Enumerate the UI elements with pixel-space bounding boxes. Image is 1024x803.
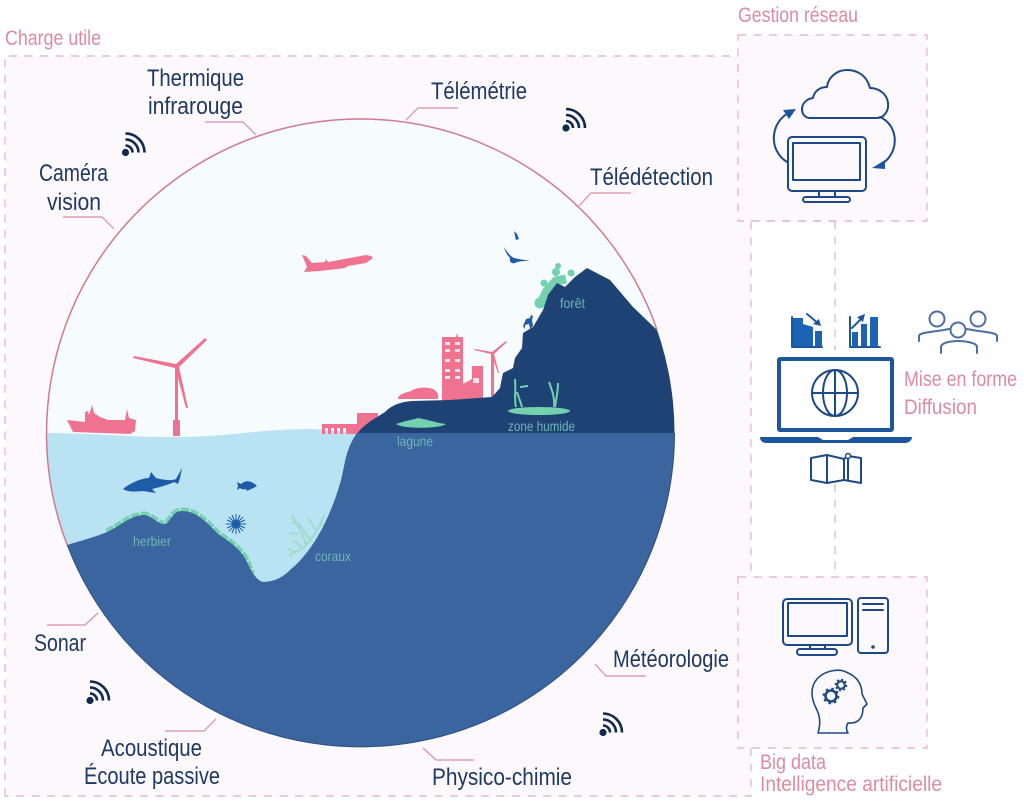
heading: mise en forme diffusion [904,368,1017,419]
icon: wifi top right [562,109,585,132]
pier [322,413,378,434]
icon: people [919,312,997,353]
sensor: caméra vision: Caméra [39,160,109,187]
sensor: physico-chimie [423,748,572,791]
icon: cloud and computer [774,70,895,202]
corals [288,515,326,556]
circular scene [40,110,700,760]
shark [123,468,182,493]
fish [237,481,257,491]
icon: desktop computer [783,598,888,655]
lagoon [396,418,446,428]
sensor: acoustique écoute passive: Écoute passive [84,763,220,790]
label: zone humide: zone humide [508,418,575,434]
wind turbine [133,338,207,436]
sensor: météorologie: Météorologie [613,646,729,673]
panel: charge utile [5,56,751,796]
heading: big data intelligence artificielle: Intelligence artificielle [760,773,942,796]
icon: wifi top left [122,134,144,156]
seabed outline [67,433,674,747]
icon: laptop with globe [760,359,912,443]
wetland [508,379,570,415]
sensor: acoustique écoute passive [84,719,220,790]
label: forêt: forêt [560,295,585,311]
sensor: télémétrie [406,78,527,120]
sensor: télédétection [579,164,713,206]
coastal land [357,268,700,434]
heading: mise en forme diffusion: Diffusion [904,396,977,419]
heading: charge utile: Charge utile [5,27,101,50]
building windows [445,342,479,383]
sensor: caméra vision: vision [47,189,101,216]
link between network and big data panels [751,221,835,577]
panel: gestion réseau [738,35,927,221]
water [47,429,356,582]
seabed [68,433,674,746]
sensor: thermique infrarouge [147,65,256,135]
sensor: sonar: Sonar [34,630,86,657]
icon: head with gears [812,670,867,733]
sensor: météorologie [595,646,729,676]
sensor: physico-chimie: Physico-chimie [432,764,572,791]
icon: wifi bottom right [599,714,622,736]
forest [534,263,574,308]
ship [67,405,136,434]
sensor: caméra vision [39,160,114,229]
small wind turbine [474,341,507,398]
birds [504,231,530,263]
sky [40,110,680,440]
label: coraux: coraux [315,548,351,564]
sensor: acoustique écoute passive: Acoustique [101,735,202,762]
sea urchin [226,514,246,534]
goat [523,315,533,329]
car [398,388,438,399]
city buildings [442,333,483,402]
icon: wifi bottom left [86,682,109,704]
panel: big data [738,577,927,748]
sensor: sonar [34,613,98,657]
sensor: télédétection: Télédétection [590,164,713,191]
icon: map [811,454,861,483]
sensor: thermique infrarouge: Thermique [147,65,244,92]
sensor: télémétrie: Télémétrie [431,78,527,105]
circle outline [47,119,657,545]
heading: big data intelligence artificielle: Big data [760,751,826,774]
icon: falling bar chart [792,314,822,347]
sensor: thermique infrarouge: infrarouge [148,93,243,120]
seagrass [107,511,252,574]
label: lagune: lagune [397,433,433,449]
plane [302,255,373,272]
icon: rising bar chart [850,314,880,347]
heading: gestion réseau: Gestion réseau [738,4,858,27]
label: herbier: herbier [133,533,171,549]
heading: big data intelligence artificielle [760,751,942,796]
